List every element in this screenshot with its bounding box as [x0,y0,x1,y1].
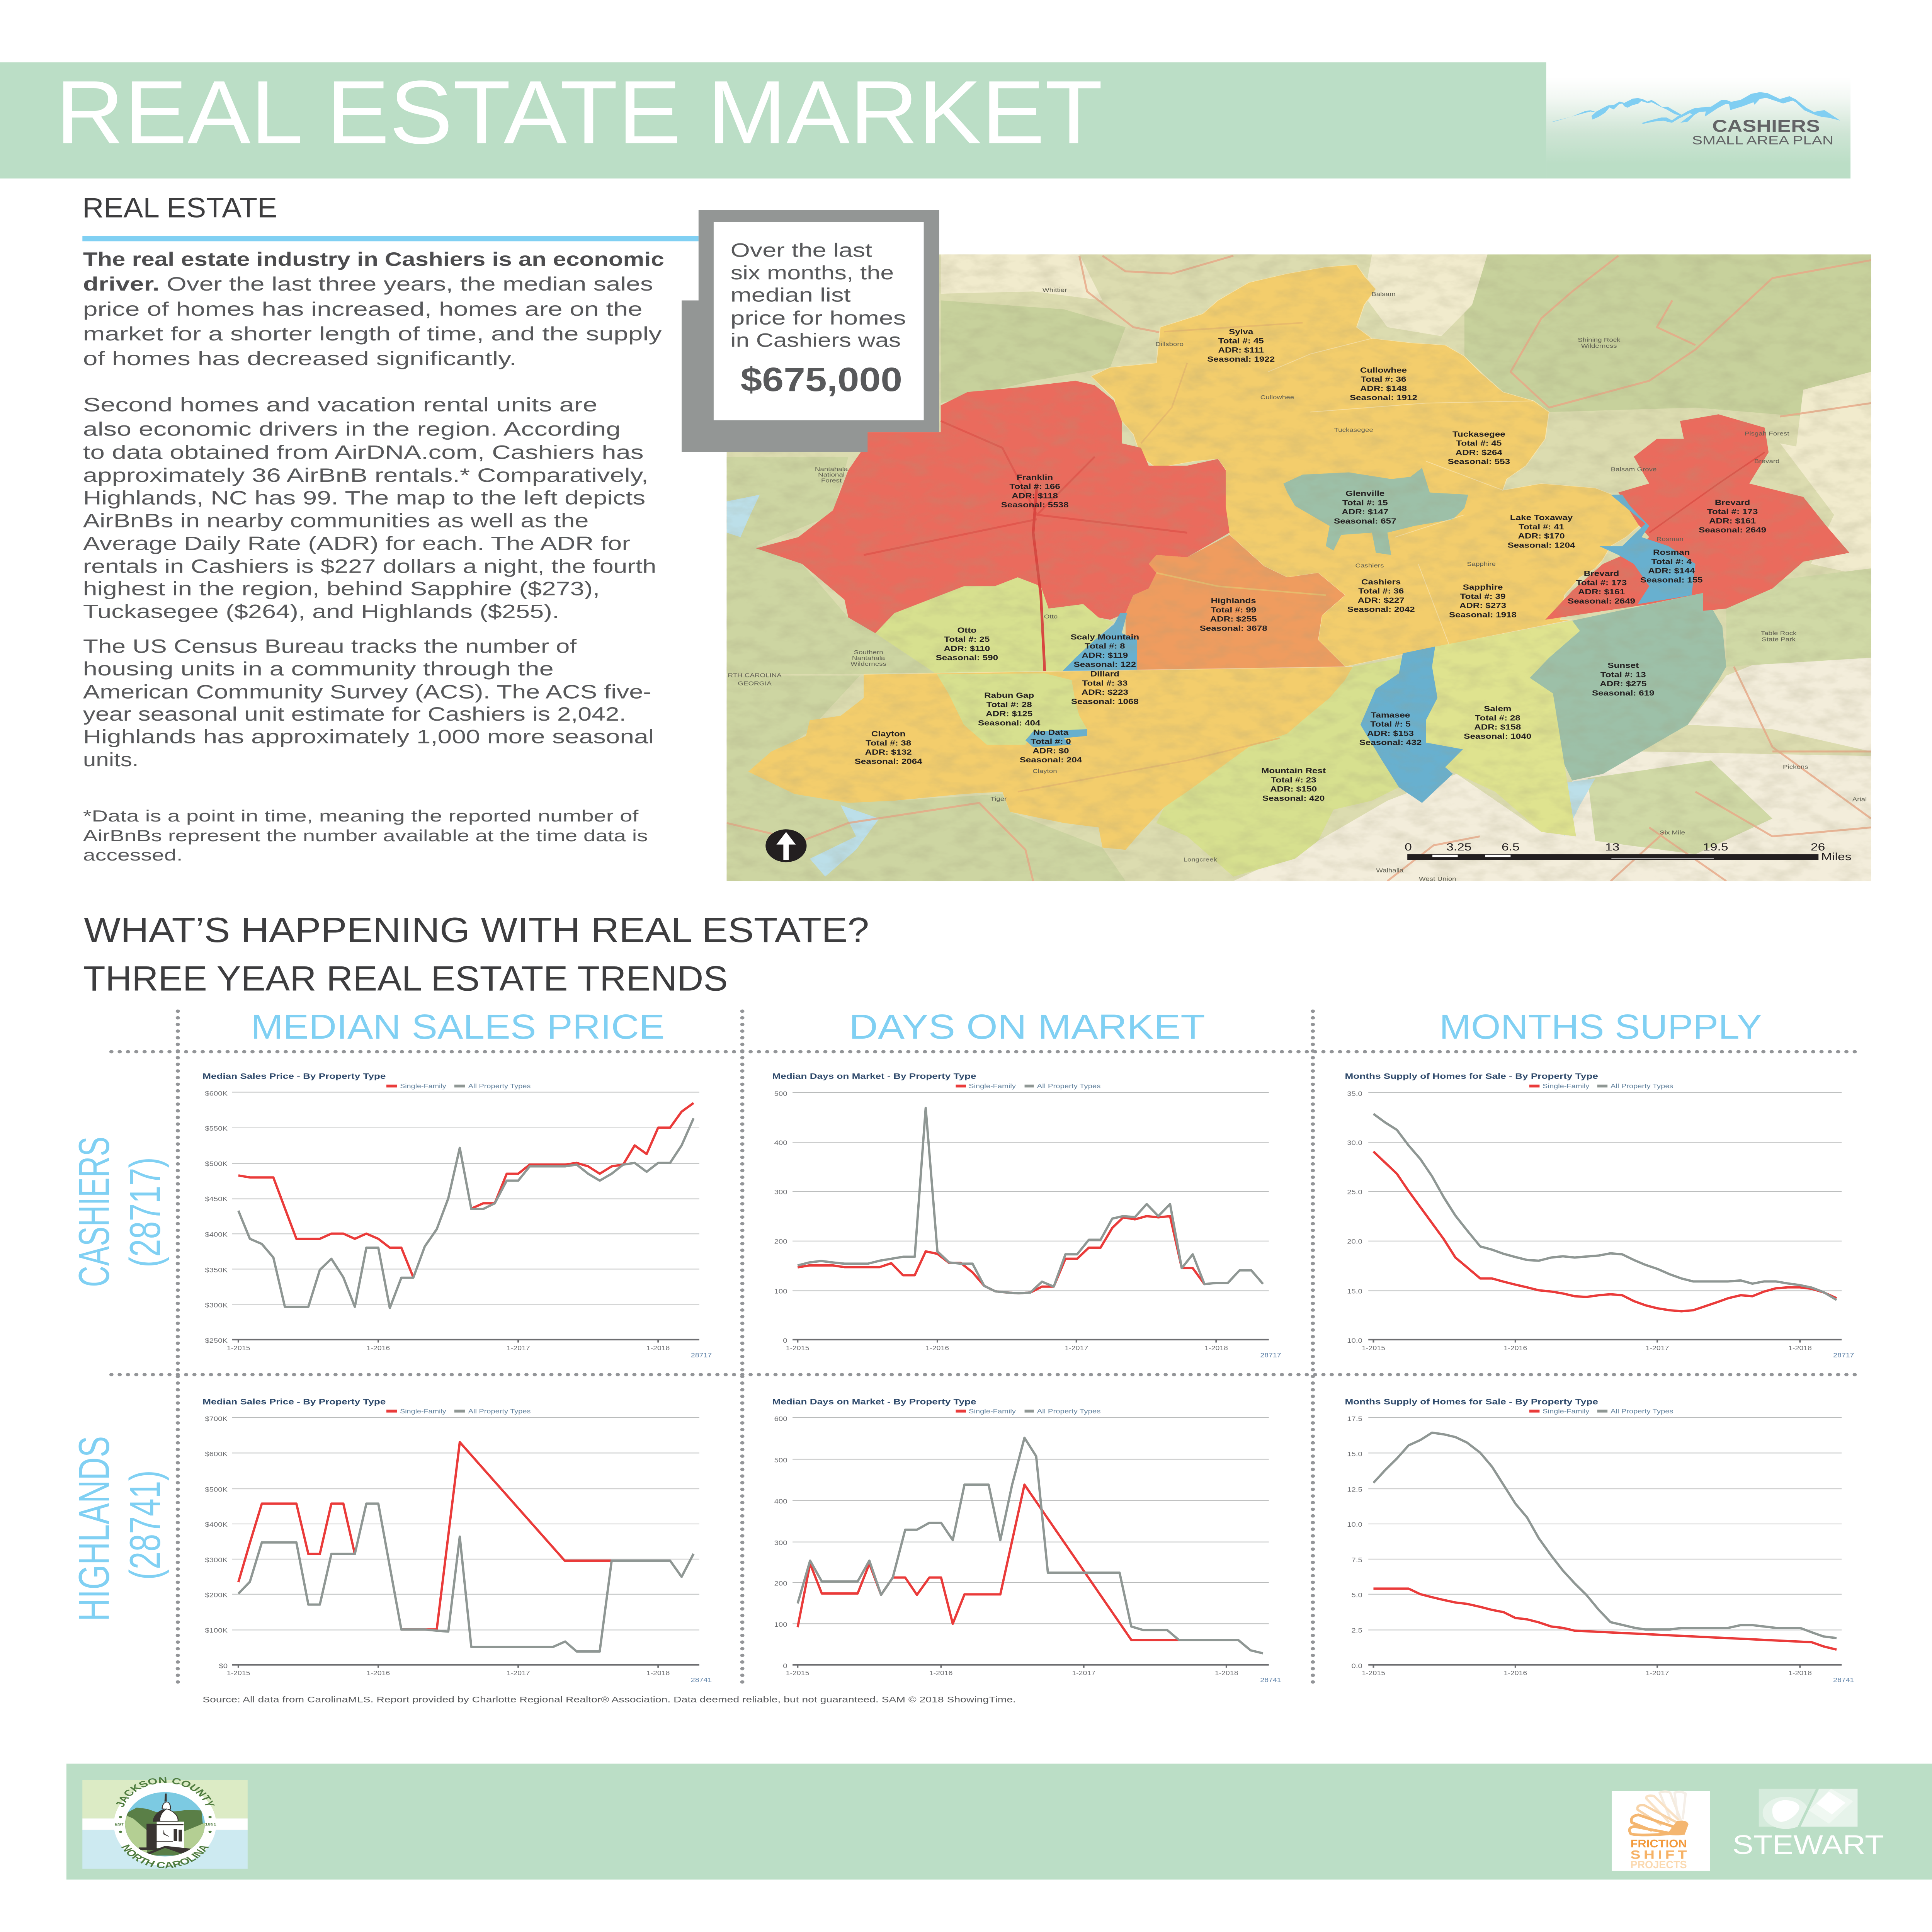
chart: Highlands months supply: 7.5 [1352,1556,1362,1564]
heading: what's happening: WHAT’S HAPPENING WITH REAL ESTATE? [84,910,869,950]
map label: Highlands: Total #: 99 [1211,605,1256,614]
map scale bar: 19.5 [1703,841,1728,853]
row label: Cashiers 28717: CASHIERS [70,1137,118,1287]
chart: Highlands months supply: 1-2018 [1788,1670,1812,1677]
chart: Cashiers months supply: Single-Family [1543,1083,1589,1090]
map scale bar: 13 [1605,841,1619,853]
map label: Cullowhee: Total #: 36 [1361,375,1406,384]
map label: Sunset: Sunset [1607,661,1639,670]
intro paragraph: The real estate industry in Cashiers is an economic [83,248,664,270]
column heading: months supply: MONTHS SUPPLY [1439,1007,1762,1046]
map label: Brevard lower: Total #: 173 [1576,578,1627,587]
chart: Cashiers months supply: 1-2016 [1503,1345,1527,1351]
place names on base map: Nantahala [815,466,848,472]
chart: Cashiers days on market: 1-2015 [786,1345,810,1351]
place names on base map: Rosman [1656,536,1684,543]
place names on base map: GEORGIA [738,680,772,687]
map label: Otto: Otto [957,626,976,634]
map label: Otto: Total #: 25 [944,635,990,644]
map label: Lake Toxaway: Total #: 41 [1519,522,1564,531]
logo: Friction Shift Projects: PROJECTS [1631,1859,1687,1871]
map label: Highlands: Seasonal: 3678 [1200,624,1267,633]
chart: Highlands days on market: 300 [774,1539,787,1546]
map label: Cashiers: Seasonal: 2042 [1347,605,1415,614]
map label: Tuckasegee: Total #: 45 [1456,439,1502,447]
map scale bar: 3.25 [1446,841,1471,853]
map label: Dillard: Total #: 33 [1082,679,1128,687]
logo: Friction Shift Projects [1612,1791,1710,1871]
chart: Cashiers days on market: 0 [783,1337,787,1344]
place names on base map: Arial [1852,796,1867,803]
footnote: *Data is a point in time, meaning the reported number of [83,807,639,825]
chart: Cashiers median sales price: 1-2018 [646,1345,670,1351]
title: REAL ESTATE MARKET [56,62,1103,162]
place names on base map: Dillsboro [1155,341,1184,347]
chart: Cashiers days on market: 400 [774,1139,787,1146]
chart: Cashiers days on market: 200 [774,1238,787,1245]
chart: Highlands days on market: 100 [774,1621,787,1628]
chart: Cashiers median sales price: 1-2016 [367,1345,390,1351]
place names on base map: Balsam [1371,291,1396,298]
intro paragraph: price of homes has increased, homes are on the [83,298,642,320]
chart: Highlands days on market [772,1397,1281,1684]
place names on base map: Balsam Grove [1611,466,1656,473]
map label: Franklin: ADR: $118 [1012,492,1058,500]
logo: Stewart [1733,1789,1884,1860]
chart: Highlands months supply: 0.0 [1352,1662,1362,1669]
chart: Cashiers months supply [1345,1071,1854,1359]
intro paragraph: driver. Over the last three years, the median sales [83,273,653,294]
map label: Sunset: ADR: $275 [1600,680,1646,688]
place names on base map: Table Rock [1761,630,1797,636]
map label: Brevard: Brevard [1715,498,1750,507]
row label: Highlands 28741: HIGHLANDS [70,1436,118,1621]
intro paragraph [83,248,664,369]
map label: Rabun Gap: Total #: 28 [986,700,1032,709]
place names on base map: Walhalla [1376,867,1404,874]
census paragraph: housing units in a community through the [83,658,554,680]
place names on base map: Pisgah Forest [1745,430,1789,437]
census paragraph: Highlands has approximately 1,000 more seasonal [83,726,654,747]
chart: Cashiers days on market: 1-2016 [925,1345,949,1351]
map label: Dillard: Dillard [1090,670,1119,678]
chart: Cashiers months supply: 1-2018 [1788,1345,1812,1351]
chart: Cashiers months supply: 20.0 [1347,1238,1362,1245]
map label: Sylva: ADR: $111 [1218,346,1264,354]
chart: Highlands days on market: All Property Types [1037,1408,1101,1415]
logo: Friction Shift Projects: SHIFT [1631,1848,1687,1862]
chart: Highlands months supply: 1-2016 [1503,1670,1527,1677]
chart: Highlands days on market: 200 [774,1580,787,1587]
map label: Scaly Mountain: Seasonal: 122 [1074,660,1136,669]
map scale bar: 6.5 [1502,841,1520,853]
chart: Cashiers median sales price: 28717 [691,1352,712,1359]
chart: Cashiers median sales price: $550K [205,1125,228,1132]
chart: Cashiers months supply: 15.0 [1347,1287,1362,1295]
chart: Cashiers months supply: 10.0 [1347,1337,1362,1344]
callout: median list price [682,210,939,452]
chart: Highlands months supply: 5.0 [1352,1592,1362,1599]
map label: Brevard: Total #: 173 [1707,507,1758,516]
map label: Cashiers: ADR: $227 [1358,596,1405,604]
chart: Cashiers median sales price [202,1071,712,1359]
map label: Otto: ADR: $110 [944,644,990,653]
map label: Brevard: Seasonal: 2649 [1699,526,1766,534]
chart: Cashiers months supply: 25.0 [1347,1189,1362,1196]
logo: Cashiers Small Area Plan: SMALL AREA PLAN [1692,133,1833,147]
map label: Glenville: ADR: $147 [1342,508,1388,516]
map label: Clayton: Seasonal: 2064 [855,757,923,765]
map label: Franklin: Seasonal: 5538 [1001,500,1069,509]
chart: Highlands median sales price: Single-Family [400,1408,446,1415]
map scale bar: Miles [1821,851,1852,862]
place names on base map: Wilderness [850,661,886,667]
chart: Highlands median sales price: $100K [205,1627,228,1634]
map of AirBnB communities [726,254,1871,882]
logo: Cashiers Small Area Plan: CASHIERS [1712,116,1820,136]
map label: Scaly Mountain: Total #: 8 [1085,642,1125,650]
chart: Highlands median sales price: $700K [205,1415,228,1422]
logo: Cashiers Small Area Plan [1546,77,1850,179]
map label: Brevard lower: Brevard [1584,569,1619,578]
map label: Highlands: Highlands [1211,597,1256,605]
map label: Glenville: Total #: 15 [1342,498,1388,507]
callout: median list price: Over the last [731,239,872,261]
map label: Tamasee: Seasonal: 432 [1359,738,1422,747]
chart: Cashiers months supply: 30.0 [1347,1139,1362,1146]
chart: Highlands days on market: 1-2015 [786,1670,810,1677]
AirBnB paragraph: Highlands, NC has 99. The map to the left depicts [83,487,645,509]
map label: Tamasee: Total #: 5 [1370,720,1411,728]
map label: No Data: Seasonal: 204 [1020,755,1082,764]
chart: Highlands months supply: 28741 [1833,1677,1854,1684]
map label: Sunset: Seasonal: 619 [1592,689,1655,697]
chart: Highlands months supply: 1-2015 [1362,1670,1385,1677]
place names on base map: Cashiers [1355,562,1384,569]
census paragraph: units. [83,749,139,770]
map label: Highlands: ADR: $255 [1210,615,1257,623]
AirBnB paragraph: also economic drivers in the region. According [83,418,621,440]
place names on base map: Forest [821,477,842,484]
place names on base map: Tuckasegee [1334,427,1373,433]
map label: Sapphire: Seasonal: 1918 [1449,611,1517,619]
chart: Cashiers days on market: 28717 [1260,1352,1281,1359]
chart: Highlands days on market: 1-2017 [1072,1670,1095,1677]
chart: Cashiers months supply: Months Supply of Homes for Sale - By Property Type [1345,1071,1598,1080]
row label: Cashiers 28717 [70,1137,169,1287]
place names on base map: West Union [1419,876,1456,882]
place names on base map: Longcreek [1183,856,1218,863]
chart: Highlands months supply: 15.0 [1347,1451,1362,1458]
chart: Highlands months supply: 17.5 [1347,1415,1362,1422]
chart: Cashiers days on market: 1-2018 [1204,1345,1228,1351]
row label: Cashiers 28717: (28717) [121,1157,169,1267]
AirBnB paragraph: rentals in Cashiers is $227 dollars a night, the fourth [83,555,656,577]
column heading: median sales price: MEDIAN SALES PRICE [251,1007,665,1046]
map label: Lake Toxaway: Lake Toxaway [1510,514,1573,522]
logo: Jackson County seal: 1851 [205,1823,216,1827]
map label: Sylva: Total #: 45 [1218,337,1264,345]
icon: north arrow [765,829,807,862]
map label: Sunset: Total #: 13 [1600,670,1646,679]
map label: Clayton: Clayton [871,730,906,738]
chart: Cashiers median sales price: All Property Types [468,1083,531,1090]
place names on base map: Sapphire [1467,561,1496,567]
chart: Cashiers median sales price: $350K [205,1266,228,1274]
map label: Clayton: Total #: 38 [866,739,911,747]
map label: Cullowhee: ADR: $148 [1360,384,1407,393]
chart: Cashiers median sales price: $400K [205,1231,228,1238]
place names on base map [728,287,1867,882]
source note: Source: All data from CarolinaMLS. Report provided by Charlotte Regional Realtor® Association. Data deemed reliable, but not guaranteed. SAM © 2018 ShowingTime. [202,1695,1016,1704]
place names on base map: Shining Rock [1578,337,1621,343]
map label: Brevard lower: Seasonal: 2649 [1568,597,1635,605]
logo: Jackson County seal [82,1775,248,1870]
place names on base map: Wilderness [1581,343,1617,349]
map label: Franklin: Total #: 166 [1009,482,1060,491]
footnote: accessed. [83,846,183,864]
map label: Glenville: Seasonal: 657 [1334,517,1396,525]
map label: Mountain Rest: Mountain Rest [1261,767,1326,775]
chart: Highlands months supply [1345,1397,1854,1684]
map label: Mountain Rest: ADR: $150 [1270,785,1317,793]
chart: Highlands median sales price: 1-2015 [227,1670,250,1677]
map label: Lake Toxaway: Seasonal: 1204 [1508,541,1575,549]
map scale bar: 0 [1405,841,1412,853]
census paragraph: year seasonal unit estimate for Cashiers is 2,042. [83,703,626,725]
chart: Highlands days on market: 500 [774,1456,787,1464]
row label: Highlands 28741 [70,1436,169,1621]
chart: Highlands median sales price: Median Sales Price - By Property Type [202,1397,386,1406]
intro paragraph: market for a shorter length of time, and the supply [83,323,662,345]
column heading: days on market: DAYS ON MARKET [849,1007,1205,1046]
chart: Cashiers median sales price: Median Sales Price - By Property Type [202,1071,386,1080]
chart: Highlands median sales price: 1-2017 [507,1670,530,1677]
map label: Dillard: Seasonal: 1068 [1071,697,1139,706]
chart: Cashiers days on market: 1-2017 [1065,1345,1088,1351]
chart: Cashiers days on market: All Property Types [1037,1083,1101,1090]
AirBnB paragraph [83,394,656,622]
chart: Highlands days on market: Single-Family [969,1408,1016,1415]
chart: Highlands months supply: 10.0 [1347,1521,1362,1528]
callout: median list price: price for homes [731,307,906,329]
chart: Cashiers months supply: All Property Types [1611,1083,1673,1090]
map label: No Data: Total #: 0 [1031,737,1071,746]
chart: Highlands median sales price: $300K [205,1556,228,1564]
AirBnB paragraph: Second homes and vacation rental units are [83,394,597,415]
map label: Tuckasegee: Tuckasegee [1452,430,1505,438]
AirBnB paragraph: approximately 36 AirBnB rentals.* Comparatively, [83,464,648,486]
logo: Jackson County seal: JACKSON COUNTY [113,1775,217,1808]
place names on base map: State Park [1762,636,1796,643]
map label: No Data: ADR: $0 [1032,747,1069,755]
map label: Dillard: ADR: $223 [1082,688,1128,697]
map label: Scaly Mountain: ADR: $119 [1082,651,1128,660]
map label: Sapphire: Sapphire [1463,583,1503,592]
chart: Highlands median sales price: $600K [205,1451,228,1458]
logo: Jackson County seal: EST [114,1823,124,1827]
chart: Highlands days on market: 1-2018 [1215,1670,1238,1677]
chart: Highlands days on market: 1-2016 [929,1670,953,1677]
callout figure: $675,000 [740,360,902,398]
chart: Highlands days on market: 28741 [1260,1677,1281,1684]
chart: Cashiers days on market: Single-Family [969,1083,1016,1090]
chart: Highlands median sales price: $200K [205,1592,228,1599]
place names on base map: Nantahala [852,655,885,662]
map label: Tuckasegee: Seasonal: 553 [1448,457,1510,466]
chart: Cashiers median sales price: $250K [205,1337,228,1344]
chart: Highlands months supply: 1-2017 [1646,1670,1669,1677]
map label: Glenville: Glenville [1345,489,1384,498]
callout: median list price: in Cashiers was [731,329,901,351]
chart: Highlands months supply: 2.5 [1352,1627,1362,1634]
map label: Franklin: Franklin [1017,473,1053,481]
chart: Cashiers days on market: 100 [774,1287,787,1295]
chart: Cashiers days on market: 500 [774,1090,787,1097]
map label: Rosman: ADR: $144 [1648,566,1695,575]
map label: No Data: No Data [1033,728,1069,736]
map label: Sylva: Seasonal: 1922 [1207,355,1275,364]
map label: Sylva: Sylva [1229,327,1253,336]
callout: median list price: six months, the [731,262,894,284]
logo: Stewart: STEWART [1733,1830,1884,1860]
chart: Highlands months supply: 12.5 [1347,1486,1362,1493]
chart: Highlands median sales price [202,1397,712,1684]
map label: Rabun Gap: Seasonal: 404 [978,719,1041,727]
place names on base map: Cullowhee [1260,394,1294,401]
footer band [66,1764,1932,1879]
map label: Mountain Rest: Seasonal: 420 [1262,794,1325,803]
map label: Mountain Rest: Total #: 23 [1271,776,1316,784]
chart: Highlands median sales price: $500K [205,1486,228,1493]
map label: Rosman: Rosman [1653,548,1690,557]
map label: Sapphire: Total #: 39 [1460,592,1505,600]
chart: Cashiers months supply: 35.0 [1347,1090,1362,1097]
map label: Sapphire: ADR: $273 [1459,601,1506,610]
place names on base map: RTH CAROLINA [728,672,782,679]
heading: three year trends: THREE YEAR REAL ESTATE TRENDS [83,959,728,998]
section heading: real estate: REAL ESTATE [82,192,277,223]
census paragraph: American Community Survey (ACS). The ACS five- [83,681,651,702]
chart: Cashiers days on market: Median Days on Market - By Property Type [772,1071,976,1080]
chart: Highlands median sales price: All Property Types [468,1408,531,1415]
map label: Salem: Total #: 28 [1475,714,1520,722]
AirBnB paragraph: Average Daily Rate (ADR) for each. The ADR for [83,533,630,554]
map scale bar [1405,841,1852,862]
map label: Salem: Seasonal: 1040 [1464,732,1531,740]
chart: Cashiers months supply: 28717 [1833,1352,1854,1359]
map label: Tuckasegee: ADR: $264 [1456,448,1503,457]
place names on base map: Southern [854,649,883,656]
logo: Jackson County seal: NORTH CAROLINA [119,1843,211,1870]
callout: median list price: median list [731,284,851,306]
map label: Rosman: Seasonal: 155 [1640,576,1703,584]
map scale bar: 26 [1811,841,1825,853]
AirBnB paragraph: highest in the region, behind Sapphire ($273), [83,578,600,599]
map label: Lake Toxaway: ADR: $170 [1518,532,1565,540]
map label: Tamasee: Tamasee [1371,711,1410,719]
chart: Cashiers median sales price: $600K [205,1090,228,1097]
census paragraph: The US Census Bureau tracks the number of [83,635,577,657]
map label: Salem: Salem [1484,704,1511,713]
chart: Cashiers months supply: 1-2015 [1362,1345,1385,1351]
AirBnB paragraph: AirBnBs in nearby communities as well as the [83,510,588,531]
chart: Highlands months supply: All Property Types [1611,1408,1673,1415]
chart: Cashiers median sales price: 1-2017 [507,1345,530,1351]
map label: Rabun Gap: ADR: $125 [986,709,1032,718]
chart: Highlands median sales price: $400K [205,1521,228,1528]
chart: Highlands months supply: Months Supply of Homes for Sale - By Property Type [1345,1397,1598,1406]
census paragraph [83,635,654,770]
map label: Rosman: Total #: 4 [1651,557,1692,566]
map label: Brevard lower: ADR: $161 [1578,587,1625,596]
AirBnB paragraph: to data obtained from AirDNA.com, Cashiers has [83,441,644,463]
place names on base map: Clayton [1032,768,1057,774]
place names on base map: Pickens [1783,764,1808,770]
logo: Friction Shift Projects: FRICTION [1631,1838,1687,1850]
map label: Otto: Seasonal: 590 [936,653,998,662]
chart: Highlands median sales price: 1-2018 [646,1670,670,1677]
place names on base map: Six Mile [1660,829,1685,836]
chart: Highlands days on market: 600 [774,1415,787,1422]
chart: Highlands days on market: 400 [774,1498,787,1505]
chart: Cashiers median sales price: $500K [205,1160,228,1167]
map label: Cullowhee: Cullowhee [1360,366,1407,374]
map label: Scaly Mountain: Scaly Mountain [1071,633,1139,641]
chart: Highlands months supply: Single-Family [1543,1408,1589,1415]
footnote [83,807,648,864]
map label: Cullowhee: Seasonal: 1912 [1350,393,1417,402]
chart: Cashiers median sales price: $300K [205,1302,228,1309]
map label: Cashiers: Total #: 36 [1358,587,1404,595]
chart: Cashiers days on market [772,1071,1281,1359]
map label: Cashiers: Cashiers [1361,578,1401,586]
chart: Cashiers median sales price: Single-Family [400,1083,446,1090]
chart: Highlands median sales price: 28741 [691,1677,712,1684]
AirBnB paragraph: Tuckasegee ($264), and Highlands ($255). [83,600,559,622]
map label: Salem: ADR: $158 [1474,723,1521,731]
place names on base map: Otto [1044,613,1058,620]
map label: Rabun Gap: Rabun Gap [984,691,1034,700]
place names on base map: Brevard [1754,458,1779,464]
chart: Cashiers days on market: 300 [774,1189,787,1196]
map label: Clayton: ADR: $132 [865,748,912,757]
place names on base map: Tiger [990,796,1007,802]
chart: Highlands median sales price: $0 [219,1662,228,1669]
place names on base map: Whittier [1043,287,1067,293]
chart: Cashiers median sales price: 1-2015 [227,1345,250,1351]
chart: Cashiers median sales price: $450K [205,1196,228,1202]
row label: Highlands 28741: (28741) [121,1470,169,1580]
chart: Highlands days on market: Median Days on Market - By Property Type [772,1397,976,1406]
map label: Brevard: ADR: $161 [1709,517,1756,525]
footnote: AirBnBs represent the number available at the time data is [83,827,648,845]
header band with title [0,62,1546,179]
chart: Highlands days on market: 0 [783,1662,787,1669]
chart: Cashiers months supply: 1-2017 [1646,1345,1669,1351]
place names on base map: National [818,471,845,478]
intro paragraph: of homes has decreased significantly. [83,348,517,369]
map label: Tamasee: ADR: $153 [1367,729,1414,738]
chart: Highlands median sales price: 1-2016 [367,1670,390,1677]
